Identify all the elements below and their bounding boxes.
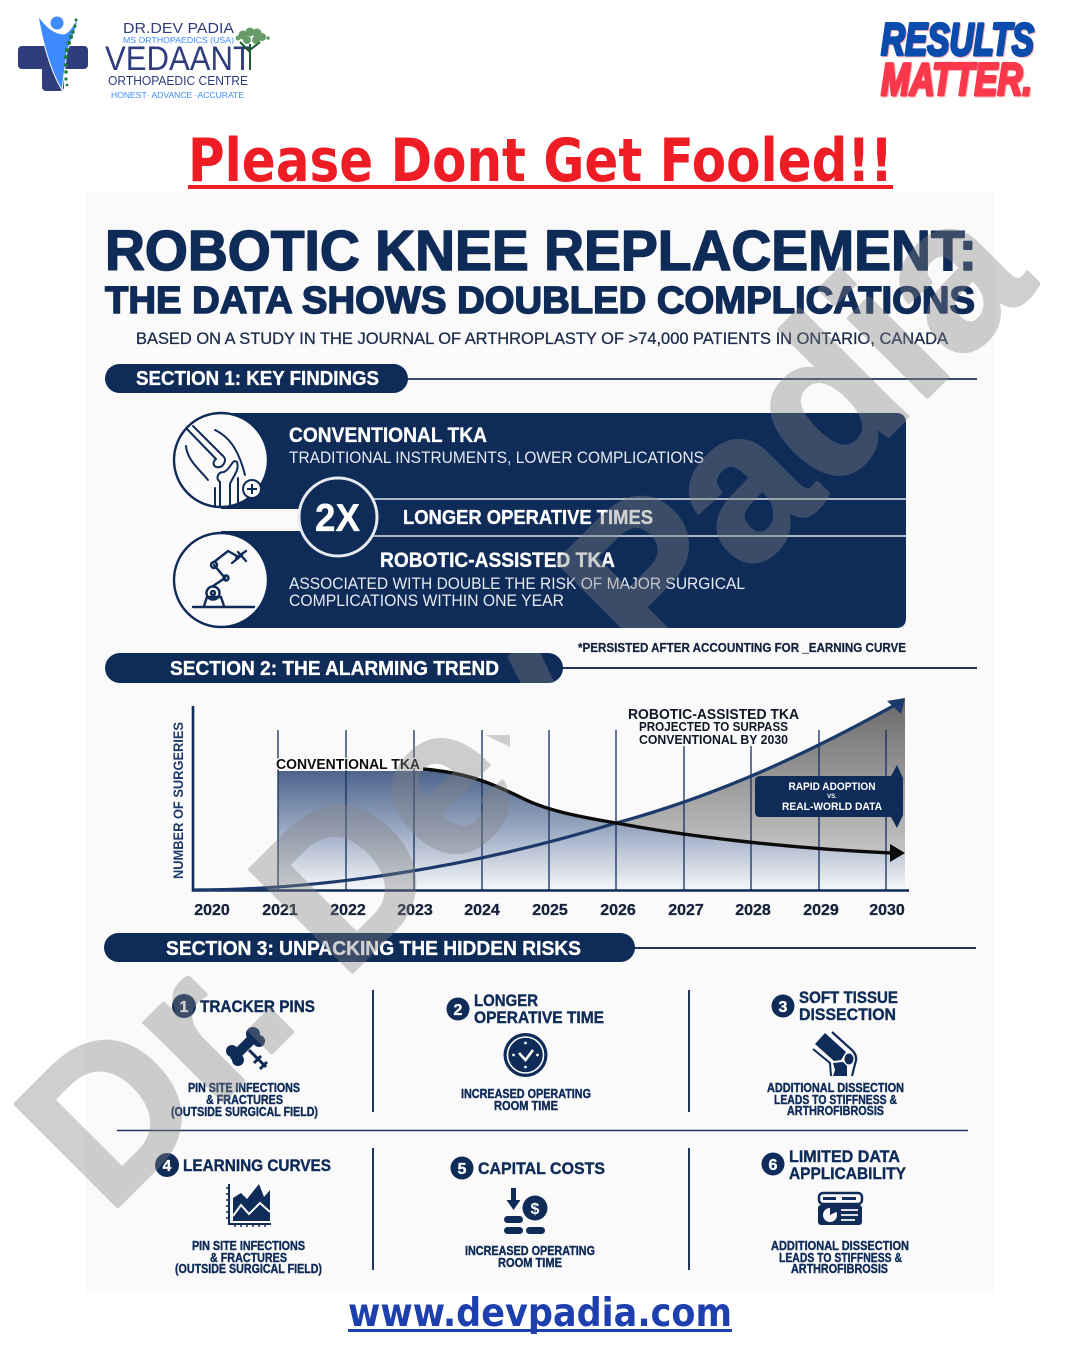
text: robotic-assisted TKA [289, 549, 745, 610]
risk 4: learning curves: & FRACTURES [210, 1251, 287, 1265]
risk 4: learning curves [155, 1153, 331, 1276]
title [105, 219, 977, 322]
x-axis years: 2026 [600, 902, 636, 919]
headline: Please Dont Get Fooled: Please Dont Get Fooled!! [188, 126, 893, 196]
x-axis years: 2029 [803, 902, 839, 919]
callout: rapid adoption vs real-world data: REAL-WORLD DATA [782, 801, 882, 813]
section 1 heading [105, 364, 977, 393]
line: conventional TKA [423, 769, 905, 862]
risk 5: capital costs: CAPITAL COSTS [478, 1159, 605, 1178]
icon: data dashboard [818, 1193, 862, 1225]
logo: Vedaant Orthopaedic Centre: VEDAANT [105, 40, 252, 78]
x-axis years: 2030 [869, 902, 905, 919]
risk 3: soft tissue dissection: SOFT TISSUE [799, 988, 898, 1007]
section 2 heading: SECTION 2: THE ALARMING TREND [170, 658, 499, 680]
risk 5: capital costs [450, 1156, 605, 1270]
label: robotic projection [628, 707, 800, 747]
risk 1: tracker pins: TRACKER PINS [200, 997, 315, 1016]
label: conventional TKA: CONVENTIONAL TKA [276, 757, 420, 773]
line: robotic-assisted TKA [193, 698, 905, 890]
logo: Vedaant Orthopaedic Centre: ORTHOPAEDIC CENTRE [108, 74, 248, 88]
icon: knee [813, 1032, 856, 1076]
section 1 heading: SECTION 1: KEY FINDINGS [136, 368, 379, 390]
x-axis years: 2022 [330, 902, 366, 919]
risk 1: tracker pins: (OUTSIDE SURGICAL FIELD) [171, 1105, 318, 1119]
label: robotic projection: PROJECTED TO SURPASS [639, 720, 788, 734]
logo: Vedaant Orthopaedic Centre: DR.DEV PADIA [123, 21, 234, 37]
text: robotic-assisted TKA: ASSOCIATED WITH DOUBLE THE RISK OF MAJOR SURGICAL [289, 574, 745, 593]
y-axis label: NUMBER OF SURGERIES [170, 722, 186, 879]
risk 6: limited data applicability: APPLICABILITY [789, 1164, 907, 1183]
gridlines [278, 730, 886, 890]
risk 2: longer operative time: LONGER [474, 991, 538, 1010]
x-axis years: 2023 [397, 902, 433, 919]
badge: 2X [299, 478, 377, 556]
text: conventional TKA: TRADITIONAL INSTRUMENTS, LOWER COMPLICATIONS [289, 448, 704, 467]
x-axis years: 2028 [735, 902, 771, 919]
x-axis years: 2024 [464, 902, 500, 919]
text: longer operative times: LONGER OPERATIVE TIMES [403, 507, 653, 529]
x-axis years: 2021 [262, 902, 298, 919]
callout: rapid adoption vs real-world data: VS. [827, 794, 837, 800]
website link: www.devpadia.com [348, 1291, 732, 1336]
risk 6: limited data applicability: 6 [769, 1157, 778, 1174]
risk 5: capital costs: ROOM TIME [498, 1256, 562, 1270]
risk 4: learning curves: 4 [163, 1158, 172, 1175]
risk 3: soft tissue dissection: ADDITIONAL DISSECTION [767, 1081, 904, 1095]
risk 6: limited data applicability [762, 1147, 909, 1276]
risk 6: limited data applicability: ARTHROFIBROSIS [791, 1262, 888, 1276]
risk 6: limited data applicability: LEADS TO STIFFNESS & [779, 1251, 902, 1265]
risk 1: tracker pins: & FRACTURES [206, 1093, 283, 1107]
risk 2: longer operative time: 2 [454, 1002, 463, 1019]
risk 4: learning curves: PIN SITE INFECTIONS [192, 1239, 305, 1253]
icon: knee joint [174, 413, 268, 507]
footnote: *PERSISTED AFTER ACCOUNTING FOR _EARNING CURVE [578, 641, 906, 655]
infographic background panel [86, 191, 994, 1293]
label: robotic projection: CONVENTIONAL BY 2030 [639, 733, 788, 747]
risk 2: longer operative time [446, 991, 604, 1113]
risk 3: soft tissue dissection: 3 [779, 999, 788, 1016]
axes [193, 706, 909, 890]
section 3 heading: SECTION 3: UNPACKING THE HIDDEN RISKS [166, 938, 581, 960]
risk 2: longer operative time: OPERATIVE TIME [474, 1008, 604, 1027]
risk 3: soft tissue dissection: DISSECTION [799, 1005, 896, 1024]
risk 5: capital costs: 5 [458, 1161, 467, 1178]
risk 5: capital costs: INCREASED OPERATING [465, 1244, 595, 1258]
text: robotic-assisted TKA: COMPLICATIONS WITHIN ONE YEAR [289, 591, 564, 610]
risk 6: limited data applicability: LIMITED DATA [789, 1147, 900, 1166]
x-axis years: 2020 [194, 902, 230, 919]
badge: 2X: 2X [315, 497, 360, 540]
x-axis years [194, 902, 905, 919]
risk 3: soft tissue dissection: LEADS TO STIFFNESS & [774, 1093, 897, 1107]
grid dividers [117, 990, 968, 1270]
icon: bone with pin [226, 1027, 267, 1069]
risk 1: tracker pins [171, 994, 318, 1119]
text: conventional TKA [289, 424, 704, 467]
line chart: surgeries trend [170, 698, 909, 919]
risk 1: tracker pins: 1 [180, 999, 189, 1016]
logo: Vedaant Orthopaedic Centre: HONEST· ADVANCE ·ACCURATE [111, 91, 244, 100]
x-axis years: 2025 [532, 902, 568, 919]
logo: Vedaant Orthopaedic Centre: MS ORTHOPAEDICS (USA) [123, 36, 234, 45]
callout: rapid adoption vs real-world data [755, 765, 903, 828]
section 3 heading [104, 933, 976, 962]
risk 2: longer operative time: ROOM TIME [494, 1099, 558, 1113]
logo: Vedaant Orthopaedic Centre [18, 15, 270, 100]
icon: clock [504, 1033, 548, 1077]
callout: rapid adoption vs real-world data: RAPID ADOPTION [788, 781, 876, 793]
x-axis years: 2027 [668, 902, 704, 919]
text: robotic-assisted TKA: ROBOTIC-ASSISTED TKA [380, 549, 615, 572]
chart area fills [278, 699, 905, 890]
risk 3: soft tissue dissection [767, 988, 904, 1118]
risk 2: longer operative time: INCREASED OPERATING [461, 1087, 591, 1101]
panel: key findings [174, 413, 906, 628]
section 2 heading [105, 653, 977, 683]
label: robotic projection: ROBOTIC-ASSISTED TKA [628, 707, 800, 723]
logo: Results Matter: MATTER. [881, 54, 1032, 105]
risk 4: learning curves: (OUTSIDE SURGICAL FIELD) [175, 1262, 322, 1276]
logo: Results Matter [881, 14, 1034, 105]
risk 4: learning curves: LEARNING CURVES [183, 1156, 331, 1175]
title: ROBOTIC KNEE REPLACEMENT: [105, 219, 977, 283]
icon: falling cost [504, 1188, 548, 1234]
risk 3: soft tissue dissection: ARTHROFIBROSIS [787, 1104, 884, 1118]
subtitle: BASED ON A STUDY IN THE JOURNAL OF ARTHROPLASTY OF >74,000 PATIENTS IN ONTARIO, CANADA [136, 329, 949, 348]
icon: falling cost: $ [531, 1201, 540, 1218]
title: THE DATA SHOWS DOUBLED COMPLICATIONS [105, 280, 975, 322]
text: conventional TKA: CONVENTIONAL TKA [289, 424, 487, 447]
icon: robotic arm [174, 533, 268, 627]
risk 1: tracker pins: PIN SITE INFECTIONS [188, 1081, 300, 1095]
risk 6: limited data applicability: ADDITIONAL DISSECTION [771, 1239, 909, 1253]
icon: volatile chart [226, 1184, 271, 1227]
